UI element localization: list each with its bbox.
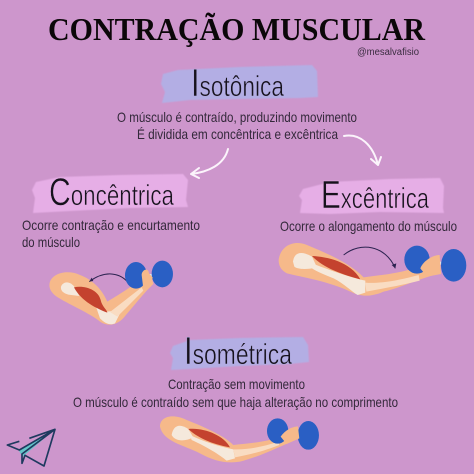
text block: Isotônica description: É dividida em concêntrica e excêntrica [137, 126, 338, 142]
arrow: to Concêntrica [191, 149, 228, 178]
heading: Isométrica: Isométrica [184, 330, 293, 373]
illustration: concentric arm [49, 261, 173, 325]
text block: Isotônica description: O músculo é contraído, produzindo movimento [117, 109, 357, 125]
text block: Isométrica description [73, 376, 398, 410]
handle: @mesalvafisio [357, 47, 419, 58]
heading: Isotônica: Isotônica [191, 62, 285, 105]
text block: Isométrica description: O músculo é contraído sem que haja alteração no comprimento [73, 394, 398, 410]
illustration: eccentric arm [279, 243, 466, 296]
text block: Isotônica description [117, 109, 357, 142]
heading: Concêntrica: Concêntrica [49, 171, 175, 214]
title: CONTRAÇÃO MUSCULAR [48, 11, 426, 47]
text block: Concêntrica description [22, 217, 200, 250]
text block: Isométrica description: Contração sem movimento [168, 376, 305, 392]
text block: Concêntrica description: Ocorre contração e encurtamento [22, 217, 200, 233]
arrow: to Excêntrica [344, 136, 381, 165]
illustration: isometric arm [160, 416, 319, 462]
text block: Concêntrica description: do músculo [22, 234, 80, 250]
heading: Excêntrica: Excêntrica [321, 174, 430, 217]
icon: paper plane [7, 429, 55, 466]
